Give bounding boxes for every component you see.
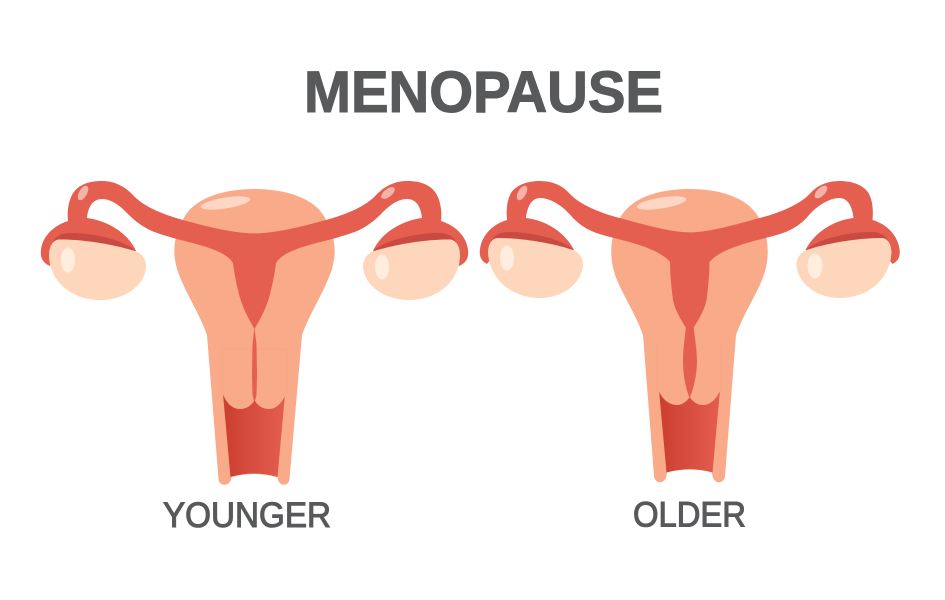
- left ovary: [488, 238, 583, 298]
- uterus body and cervix walls: [611, 189, 768, 482]
- uterus highlight: [636, 194, 687, 212]
- left ovary: [49, 239, 146, 300]
- label: older: OLDER: [633, 496, 746, 534]
- vaginal canal: [223, 394, 285, 477]
- central cavity seam: [252, 233, 257, 328]
- cervix lobes: [658, 350, 721, 405]
- cervix lobes: [222, 350, 286, 409]
- label: younger: YOUNGER: [163, 496, 331, 535]
- left fimbria shadow: [50, 233, 136, 260]
- ovary highlights: [500, 246, 822, 278]
- left tube and fimbria: [480, 181, 690, 328]
- uterus body and cervix walls: [174, 189, 335, 485]
- cervical canal: [252, 327, 257, 401]
- cervical canal: [683, 326, 697, 398]
- ovary highlights: [61, 248, 389, 280]
- left tube and fimbria: [41, 181, 254, 329]
- central cavity seam: [687, 232, 692, 332]
- uterus highlight: [200, 194, 251, 212]
- right fimbria shadow: [806, 232, 892, 258]
- right fimbria shadow: [373, 233, 459, 260]
- title: MENOPAUSE: [304, 60, 663, 125]
- vaginal canal: [659, 390, 720, 472]
- tube highlights: [515, 184, 829, 202]
- right ovary: [796, 238, 892, 298]
- cervix outline: [222, 349, 287, 394]
- right tube and fimbria: [254, 181, 468, 329]
- right ovary: [363, 239, 460, 300]
- right tube and fimbria: [690, 181, 900, 328]
- diagram: younger uterus: [41, 181, 468, 485]
- left fimbria shadow: [488, 232, 574, 258]
- tube highlights: [76, 184, 397, 202]
- cervix shading: [657, 346, 721, 392]
- diagram: older uterus: [480, 181, 900, 482]
